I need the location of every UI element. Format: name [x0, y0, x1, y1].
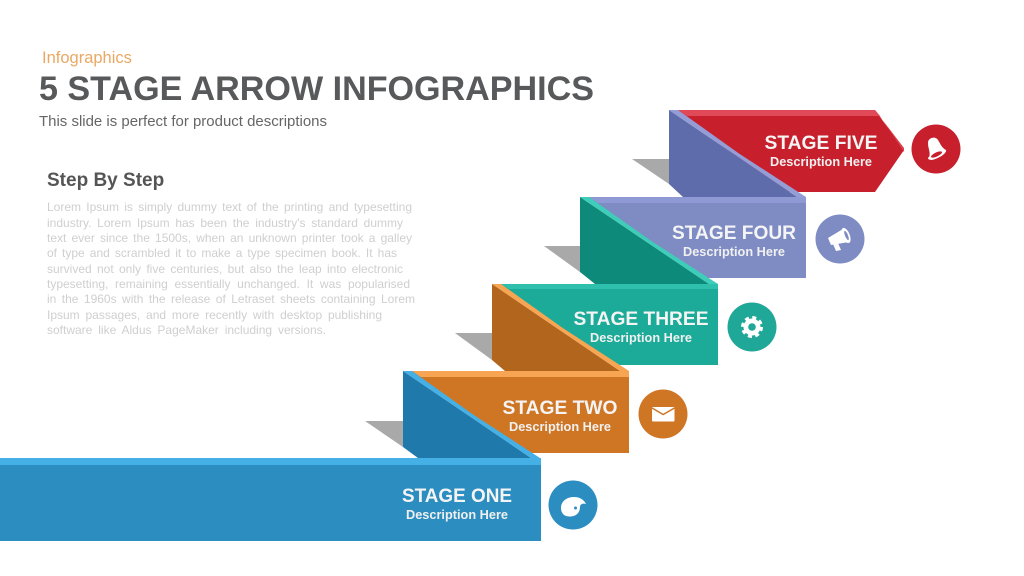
stage three arrow: Description Here — [590, 331, 692, 345]
stage five arrow: Description Here — [770, 155, 872, 169]
stage three arrow: STAGE THREE — [574, 308, 708, 330]
body paragraph: in the 1960s with the release of Letraset sheets containing Lorem — [47, 292, 415, 306]
stage four arrow — [544, 197, 806, 284]
stage four arrow: STAGE FOUR — [672, 222, 796, 244]
stage two arrow: STAGE TWO — [502, 397, 618, 419]
arrow body — [584, 197, 806, 278]
body paragraph: text ever since the 1500s, when an unknown printer took a galley — [47, 231, 412, 245]
heading: step by step: Step By Step — [47, 170, 164, 191]
stage four arrow: Description Here — [683, 245, 785, 259]
body paragraph: typesetting, remaining essentially unchanged. It was popularised — [47, 277, 410, 291]
stage one arrow — [0, 458, 541, 541]
icon: palette — [548, 480, 598, 530]
orange fold — [492, 284, 620, 371]
blue fold — [403, 371, 531, 458]
stage five arrow: STAGE FIVE — [764, 132, 878, 154]
arrow body — [407, 371, 629, 453]
body paragraph — [47, 200, 415, 337]
fold shadow — [544, 246, 580, 272]
header label: Infographics — [42, 49, 132, 67]
body paragraph: Ipsum passages, and more recently with desktop publishing — [47, 308, 382, 322]
stage three arrow — [455, 284, 718, 371]
icon: megaphone — [816, 214, 864, 264]
purple fold — [669, 110, 797, 197]
fold shadow — [455, 333, 492, 360]
body paragraph: industry. Lorem Ipsum has been the industry's standard dummy — [47, 216, 403, 230]
body paragraph: of type and scrambled it to make a type specimen book. It has — [47, 246, 397, 260]
stage one arrow: Description Here — [406, 508, 508, 522]
stage five arrow — [632, 110, 904, 197]
icon: gear — [728, 302, 776, 352]
arrow body — [496, 284, 718, 365]
subtitle: This slide is perfect for product descriptions — [39, 113, 327, 130]
fold shadow — [632, 159, 669, 184]
teal fold — [580, 197, 709, 284]
arrow body — [672, 110, 904, 192]
body paragraph: survived not only five centuries, but also the leap into electronic — [47, 262, 403, 276]
body paragraph: software like Aldus PageMaker including versions. — [47, 323, 326, 337]
stage one arrow: STAGE ONE — [402, 485, 512, 507]
stage two arrow — [365, 371, 629, 458]
stage two arrow: Description Here — [509, 420, 611, 434]
title: 5 STAGE ARROW INFOGRAPHICS — [39, 70, 594, 108]
body paragraph: Lorem Ipsum is simply dummy text of the printing and typesetting — [47, 200, 412, 214]
fold shadow — [365, 421, 403, 447]
icon: bell — [912, 124, 960, 174]
arrow body — [0, 458, 541, 541]
icon: envelope — [638, 390, 688, 438]
